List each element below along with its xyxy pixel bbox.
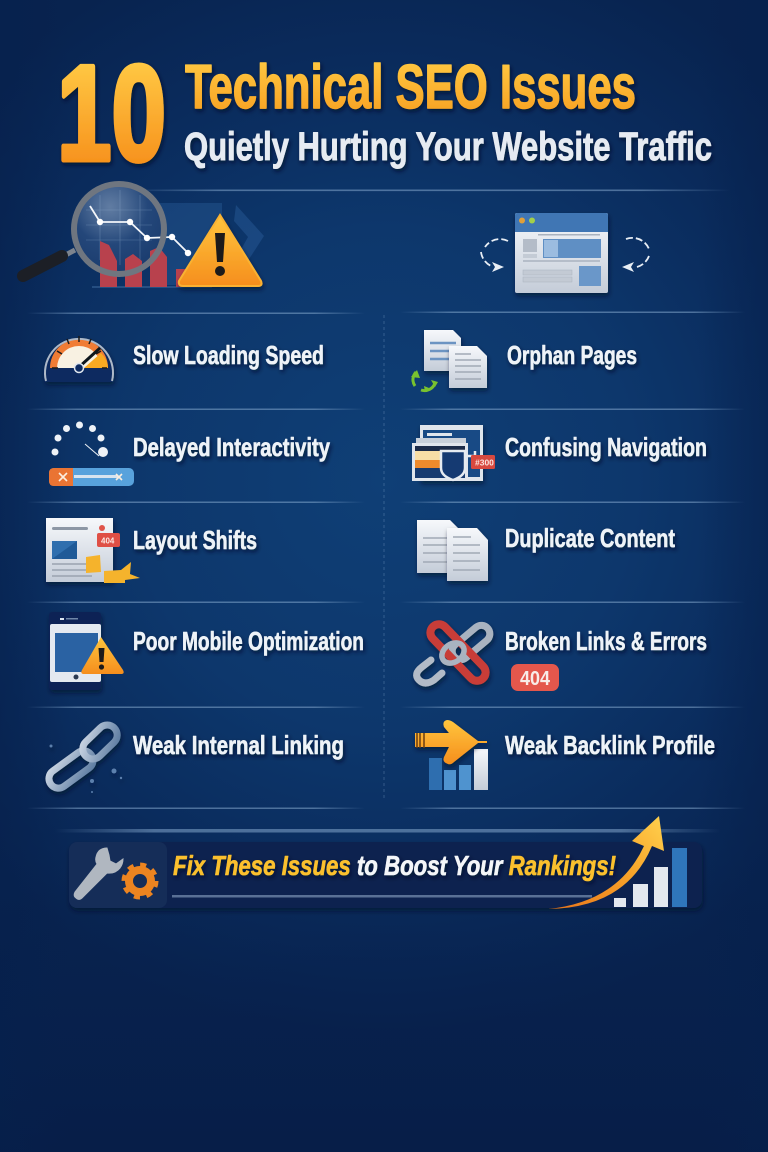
icon: arrow above bars: [415, 720, 488, 790]
icon: documents with green cycle: [411, 330, 487, 392]
item: Duplicate Content: [417, 520, 675, 581]
icon: chain links: [45, 721, 122, 793]
icon: wrench and gear: [69, 842, 167, 908]
item: Broken Links & Errors: [417, 621, 707, 691]
label: Slow Loading Speed: [133, 340, 324, 370]
item: Orphan Pages: [411, 330, 637, 392]
icon: loading dots and progress bar: [49, 422, 134, 486]
icon: magnifier over declining chart with warning: [23, 184, 264, 288]
item: Weak Backlink Profile: [415, 720, 715, 790]
icon: growth bars and arrow: [548, 816, 687, 909]
label: Confusing Navigation: [505, 432, 707, 462]
item: Layout Shifts: [46, 518, 257, 583]
label: Delayed Interactivity: [133, 432, 330, 462]
label: Weak Backlink Profile: [505, 730, 715, 760]
icon: broken chain: [417, 621, 493, 684]
icon: shifting page layout: 404: [101, 536, 115, 546]
label: Weak Internal Linking: [133, 730, 344, 760]
icon: browser window with refresh arrows: [481, 213, 649, 293]
item: Confusing Navigation: [412, 425, 707, 481]
tagline: Fix These Issues to Boost Your Rankings!: [173, 850, 616, 881]
item: Delayed Interactivity: [49, 422, 330, 486]
icon: speedometer: [45, 336, 114, 382]
badge: 404: [511, 664, 559, 691]
icon: stacked windows with route and badge: [412, 425, 495, 481]
label: Orphan Pages: [507, 340, 637, 370]
icon: stacked windows with route and badge: #300: [475, 458, 494, 468]
item: Poor Mobile Optimization: [49, 612, 364, 690]
icon: shifting page layout: [46, 518, 140, 583]
label: Layout Shifts: [133, 525, 257, 555]
call to action banner: [69, 816, 702, 909]
icon: duplicate documents: [417, 520, 488, 581]
title: number 10: 10: [57, 37, 166, 189]
icon: phone with warning: [49, 612, 124, 690]
label: Poor Mobile Optimization: [133, 626, 364, 656]
label: Duplicate Content: [505, 523, 675, 553]
badge: 404: 404: [520, 668, 551, 690]
item: Slow Loading Speed: [45, 336, 324, 382]
item: Weak Internal Linking: [45, 721, 344, 793]
